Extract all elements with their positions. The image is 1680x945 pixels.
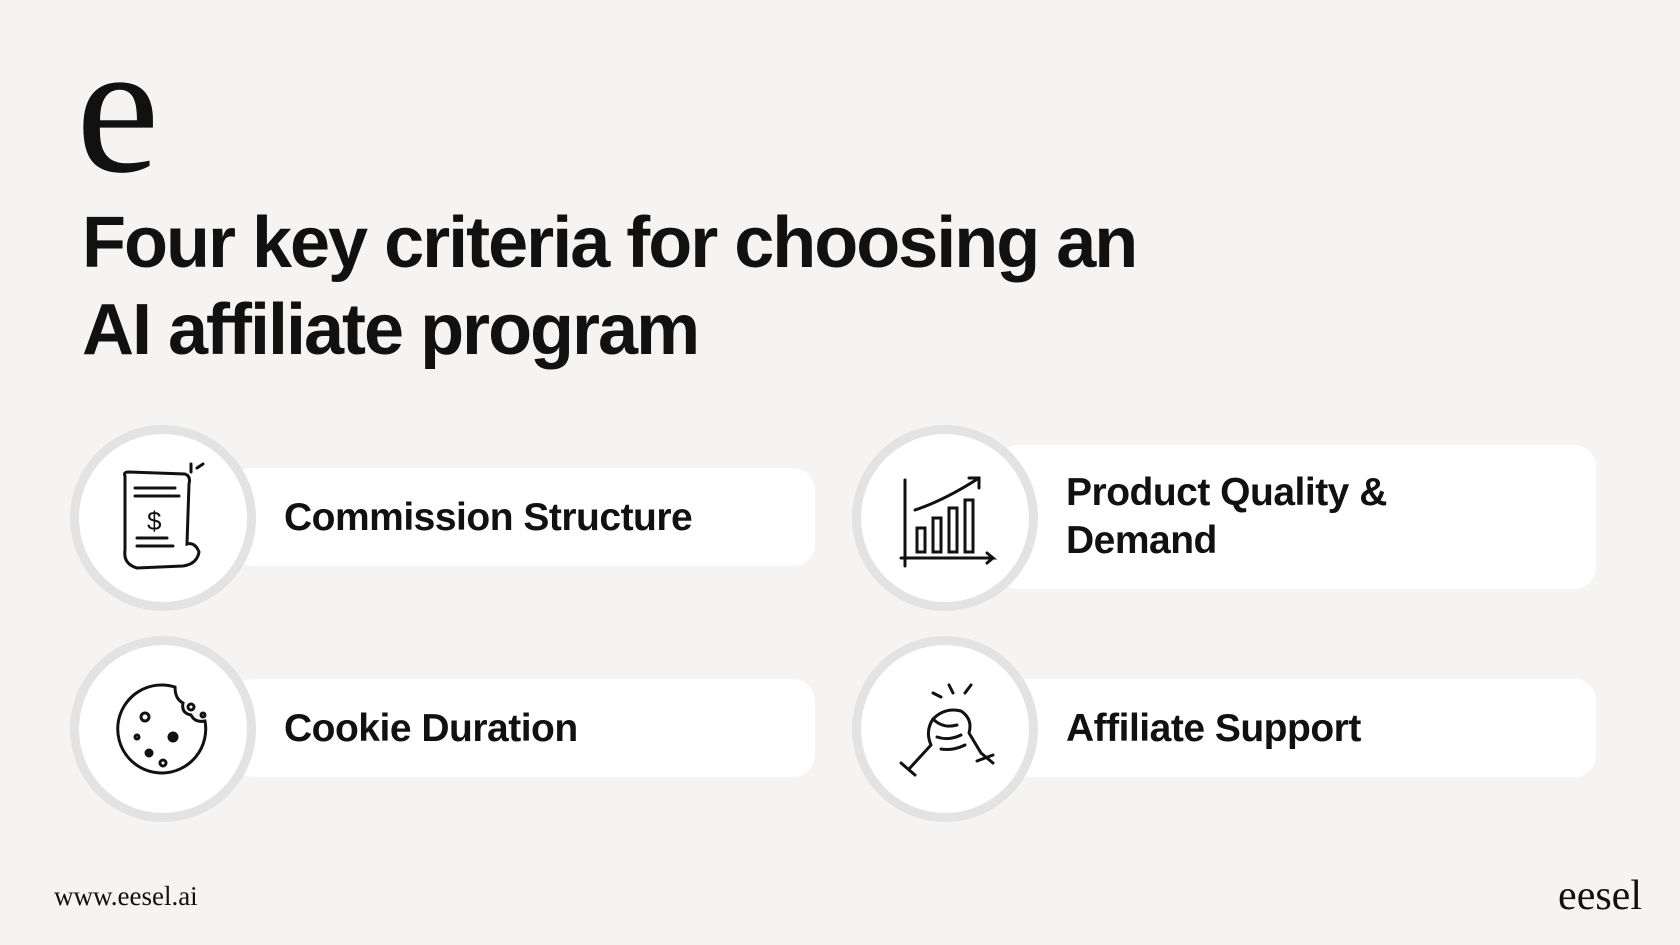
icon: growth chart [852,425,1038,611]
card: affiliate support [852,636,1596,822]
pill [996,679,1596,777]
label: Demand [1066,519,1217,562]
label [1066,471,1387,562]
pill [230,679,815,777]
card: commission structure [70,425,815,611]
footer brand: eesel [1558,873,1642,919]
title [82,203,1136,370]
logo: e [76,3,159,212]
icon: handshake [852,636,1038,822]
footer url: www.eesel.ai [54,881,198,911]
label: Product Quality & [1066,471,1387,514]
label: Cookie Duration [284,707,578,750]
pill [230,468,815,566]
pill [996,445,1596,589]
card: product quality [852,425,1596,611]
icon: receipt: $ [147,506,162,536]
title: AI affiliate program [82,290,698,370]
label: Commission Structure [284,496,692,539]
icon: receipt [70,425,256,611]
title: Four key criteria for choosing an [82,203,1136,283]
icon: cookie [70,636,256,822]
label: Affiliate Support [1066,707,1361,750]
card: cookie duration [70,636,815,822]
